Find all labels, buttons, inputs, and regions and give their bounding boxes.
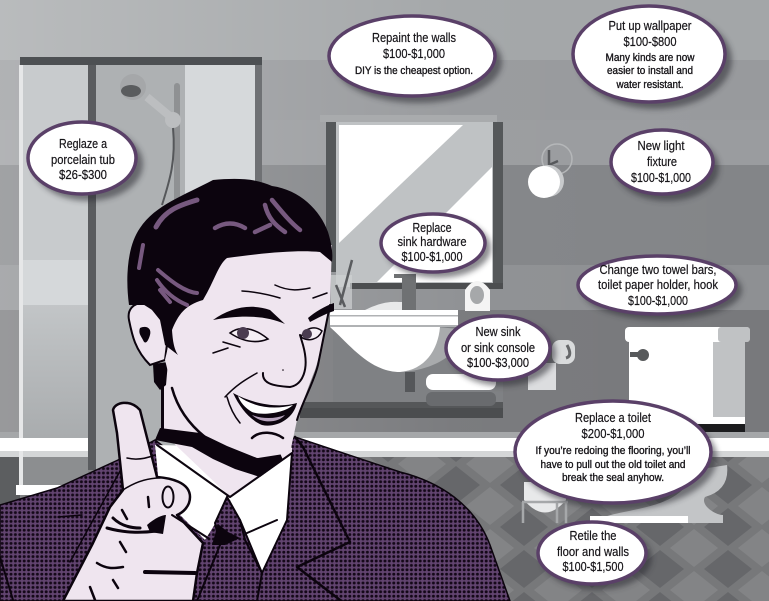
callout: reglaze a porcelain tub bbox=[28, 122, 143, 201]
suit bbox=[0, 437, 510, 601]
callout: change towel bars: toilet paper holder, hook bbox=[598, 277, 718, 292]
callout: reglaze a porcelain tub: $26-$300 bbox=[59, 167, 107, 182]
callout: replace sink hardware: sink hardware bbox=[398, 234, 466, 249]
callout: new sink or sink console bbox=[446, 316, 556, 386]
eyebrows bbox=[213, 303, 334, 324]
hair highlights bbox=[139, 200, 300, 305]
callout: replace sink hardware: $100-$1,000 bbox=[402, 249, 462, 264]
wall light bbox=[528, 144, 572, 198]
callout: put up wallpaper: Put up wallpaper bbox=[608, 18, 692, 33]
toilet bbox=[522, 327, 750, 523]
thumb crease and nail bbox=[123, 455, 160, 490]
callout: new light fixture: $100-$1,000 bbox=[631, 170, 691, 185]
callout: replace a toilet: Replace a toilet bbox=[575, 410, 651, 425]
face bbox=[165, 245, 332, 458]
pointing hand bbox=[63, 403, 208, 601]
eyes bbox=[230, 327, 322, 341]
callout: put up wallpaper bbox=[573, 6, 732, 109]
callout: repaint the walls: $100-$1,000 bbox=[383, 46, 445, 61]
callout: new sink or sink console: New sink bbox=[476, 324, 521, 339]
callout: new sink or sink console: or sink console bbox=[461, 340, 535, 355]
sink console bbox=[300, 274, 503, 418]
callout: replace sink hardware: Replace bbox=[412, 220, 452, 235]
callout: replace a toilet: break the seal anyhow. bbox=[562, 472, 664, 484]
callout: new light fixture: fixture bbox=[647, 154, 677, 169]
callout: put up wallpaper: $100-$800 bbox=[624, 34, 676, 49]
callout: replace a toilet: have to pull out the old toilet and bbox=[540, 459, 686, 471]
callout: reglaze a porcelain tub: porcelain tub bbox=[51, 152, 115, 167]
callout: repaint the walls bbox=[329, 16, 502, 103]
callout: put up wallpaper: easier to install and bbox=[607, 65, 693, 77]
ear bbox=[129, 303, 170, 365]
mirror bbox=[320, 115, 503, 289]
callout: retile the floor and walls bbox=[538, 522, 652, 590]
suit and collar lines bbox=[0, 362, 350, 600]
callout: put up wallpaper: water resistant. bbox=[616, 79, 684, 91]
man pointing at viewer bbox=[0, 179, 510, 601]
callout: change towel bars: $100-$1,000 bbox=[628, 293, 688, 308]
tiled floor bbox=[0, 457, 769, 601]
callout: repaint the walls: Repaint the walls bbox=[372, 30, 456, 45]
inner ear bbox=[139, 327, 150, 342]
tie bbox=[197, 497, 262, 601]
callout: retile the floor and walls: floor and walls bbox=[557, 544, 629, 559]
jaw and face lines bbox=[172, 285, 330, 438]
callout: replace a toilet: If you’re redoing the flooring, you’ll bbox=[536, 445, 690, 457]
callout: new light fixture: New light bbox=[638, 138, 685, 153]
shirt bbox=[155, 445, 292, 573]
callout: new sink or sink console: $100-$3,000 bbox=[467, 355, 529, 370]
wall bands bbox=[0, 0, 769, 440]
callout: retile the floor and walls: $100-$1,500 bbox=[562, 559, 624, 574]
shower enclosure bbox=[0, 57, 262, 507]
callout: change towel bars bbox=[578, 256, 742, 320]
callout: new light fixture bbox=[611, 130, 719, 201]
tile border bbox=[0, 432, 769, 457]
callout: reglaze a porcelain tub: Reglaze a bbox=[59, 136, 108, 151]
callout: replace sink hardware bbox=[381, 214, 491, 278]
mouth bbox=[233, 393, 297, 426]
toothbrush glass bbox=[331, 260, 352, 309]
callout: change towel bars: Change two towel bars, bbox=[600, 262, 716, 277]
finger lines bbox=[90, 497, 208, 600]
neck bbox=[162, 365, 292, 497]
callout: replace a toilet bbox=[515, 401, 717, 510]
shower head and rail bbox=[120, 74, 181, 213]
callout: replace a toilet: $200-$1,000 bbox=[582, 426, 644, 441]
hair bbox=[127, 179, 332, 355]
callout: put up wallpaper: Many kinds are now bbox=[606, 52, 695, 64]
callout: repaint the walls: DIY is the cheapest option. bbox=[355, 65, 473, 77]
callout: retile the floor and walls: Retile the bbox=[570, 528, 616, 543]
toilet paper holder bbox=[528, 340, 575, 390]
